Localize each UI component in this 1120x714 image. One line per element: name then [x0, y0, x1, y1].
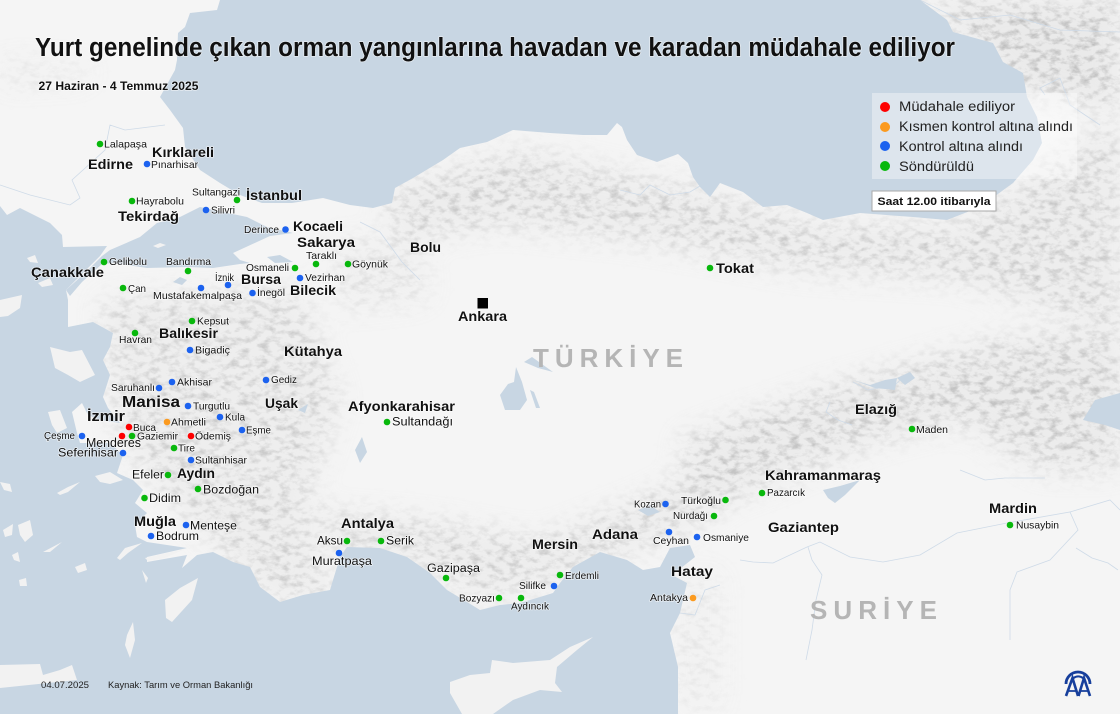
province labels: Mersin [532, 536, 578, 552]
point: Kula [217, 412, 245, 424]
point: Hayrabolu: Hayrabolu [136, 196, 184, 208]
province labels: Sakarya [297, 234, 355, 250]
point: Gaziemir: Gaziemir [137, 432, 179, 442]
point: Mustafakemalpaşa: Mustafakemalpaşa [153, 291, 242, 302]
province labels: Kocaeli [293, 218, 343, 234]
point: Kozan: Kozan [634, 500, 661, 510]
province labels: Bolu [410, 239, 441, 255]
point: İnegöl: İnegöl [257, 286, 285, 299]
legend item: Kısmen kontrol altına alındı: Kısmen kontrol altına alındı [899, 119, 1073, 134]
province labels: Manisa [122, 394, 180, 411]
point: Lalapaşa: Lalapaşa [104, 140, 147, 150]
point: Sultandağı: Sultandağı [392, 416, 453, 428]
point: Serik: Serik [386, 534, 415, 548]
point: Turgutlu: Turgutlu [193, 402, 230, 412]
point: Buca: Buca [133, 423, 156, 434]
point: İznik [215, 271, 235, 288]
province labels: Tokat [716, 260, 754, 276]
point: Muratpaşa: Muratpaşa [312, 554, 372, 568]
point: Tire: Tire [178, 444, 195, 454]
province labels: Kütahya [284, 343, 342, 359]
point: İnegöl [249, 286, 285, 299]
province labels: Bilecik [290, 282, 336, 298]
country label: Türkiye: TÜRKİYE [533, 343, 683, 373]
point: Bozdoğan: Bozdoğan [203, 482, 259, 496]
point: Sultangazi: Sultangazi [192, 188, 240, 198]
point: Derince: Derince [244, 225, 279, 236]
Sea of Marmara [66, 207, 293, 296]
legend item: Müdahale ediliyor: Müdahale ediliyor [899, 99, 1016, 114]
province labels: Bursa [241, 271, 281, 287]
point: Ödemiş: Ödemiş [195, 430, 231, 442]
point: Aydıncık: Aydıncık [511, 602, 550, 612]
province labels: Adana [592, 526, 638, 542]
point: Havran [119, 330, 152, 346]
point: Sultangazi [192, 188, 240, 203]
point: Silifke: Silifke [519, 581, 546, 592]
point: Eşme: Eşme [246, 426, 271, 436]
point: Mustafakemalpaşa [153, 285, 242, 302]
time note box [872, 191, 996, 211]
point: Gelibolu: Gelibolu [109, 257, 147, 268]
province labels: Balıkesir [159, 325, 219, 341]
province labels [31, 144, 1037, 579]
province labels: Afyonkarahisar [348, 398, 456, 414]
point: Göynük: Göynük [352, 260, 389, 270]
panel: Mediterranean and Aegean islands [0, 243, 593, 714]
province labels: Antalya [341, 515, 394, 531]
point: Bandırma: Bandırma [166, 257, 211, 268]
point: Havran: Havran [119, 335, 152, 346]
point: Menteşe: Menteşe [190, 518, 237, 532]
date range subtitle: 27 Haziran - 4 Temmuz 2025 [38, 81, 199, 93]
point: Ceyhan [653, 529, 689, 547]
point: Kepsut: Kepsut [197, 316, 229, 328]
point: Osmaniye: Osmaniye [703, 533, 749, 544]
point: Gazipaşa: Gazipaşa [427, 563, 481, 575]
point: Nusaybin: Nusaybin [1016, 520, 1059, 532]
province labels: Çanakkale [31, 264, 104, 280]
point: Türkoğlu: Türkoğlu [681, 496, 721, 507]
point: Didim: Didim [149, 491, 181, 505]
time note box: Saat 12.00 itibarıyla [878, 196, 991, 208]
icon: agency logo [1066, 672, 1090, 696]
point: Efeler: Efeler [132, 470, 164, 482]
point: Seferihisar: Seferihisar [58, 446, 118, 460]
point: Vezirhan: Vezirhan [305, 273, 345, 284]
country label: Suriye: SURİYE [810, 595, 937, 625]
point: Taraklı: Taraklı [306, 251, 337, 262]
point: Maden: Maden [916, 425, 948, 436]
point: Bigadiç: Bigadiç [195, 346, 230, 356]
point: Osmaneli: Osmaneli [246, 263, 289, 274]
point: Taraklı [306, 251, 337, 267]
point: Gediz: Gediz [271, 375, 297, 386]
icon: Ankara capital marker [478, 298, 488, 308]
province labels: Gaziantep [768, 519, 839, 535]
point: Ahmetli: Ahmetli [171, 418, 206, 428]
legend [872, 93, 1077, 179]
province labels: Elazığ [855, 401, 897, 417]
province labels: Kahramanmaraş [765, 467, 881, 483]
legend item: Kontrol altına alındı: Kontrol altına alındı [899, 139, 1023, 154]
point: Erdemli: Erdemli [565, 571, 599, 582]
province labels: İstanbul [246, 187, 302, 203]
fire points: dots and district labels [44, 140, 1059, 612]
panel: lakes [173, 255, 1120, 516]
point: Sultanhisar: Sultanhisar [195, 456, 248, 466]
point: Saruhanlı: Saruhanlı [111, 383, 155, 394]
province labels: Uşak [265, 395, 298, 411]
point: Ceyhan: Ceyhan [653, 536, 689, 547]
point: Çan [120, 284, 146, 295]
legend item: Söndürüldü: Söndürüldü [899, 159, 974, 174]
point: Aksu: Aksu [317, 534, 343, 548]
point: Tokat [707, 265, 713, 271]
point: Antakya: Antakya [650, 593, 688, 604]
point: Pazarcık: Pazarcık [767, 488, 806, 499]
point: İznik: İznik [215, 271, 235, 284]
point: Bandırma [166, 257, 211, 274]
point: Pınarhisar: Pınarhisar [151, 160, 199, 171]
province labels: İzmir [87, 408, 125, 425]
province labels: Edirne [88, 156, 133, 172]
province labels: Mardin [989, 500, 1037, 516]
point: Bozyazı: Bozyazı [459, 594, 495, 604]
point: Silivri: Silivri [211, 206, 235, 216]
point: Çeşme: Çeşme [44, 431, 75, 442]
point: Tire [171, 444, 195, 454]
point: Gazipaşa [427, 563, 481, 581]
province labels: Muğla [134, 513, 176, 529]
province labels: Kırklareli [152, 144, 214, 160]
point: Bodrum: Bodrum [156, 529, 199, 543]
point: Akhisar: Akhisar [177, 378, 213, 388]
footer source: Kaynak: Tarım ve Orman Bakanlığı [108, 680, 253, 691]
point: Aydıncık [511, 595, 550, 612]
Aegean and Mediterranean [0, 206, 695, 714]
point: Menderes: Menderes [86, 436, 141, 450]
province labels: Tekirdağ [118, 208, 179, 224]
province labels: Ankara [458, 308, 507, 324]
province labels: Hatay [671, 563, 713, 579]
Black Sea [160, 0, 1042, 220]
point: Nurdağı: Nurdağı [673, 511, 708, 522]
point: Çan: Çan [128, 284, 146, 295]
title: Yurt genelinde çıkan orman yangınlarına havadan ve karadan müdahale ediliyor [35, 34, 955, 62]
point: Kula: Kula [225, 412, 245, 424]
province labels: Aydın [177, 465, 215, 481]
footer date: 04.07.2025 [41, 680, 89, 691]
